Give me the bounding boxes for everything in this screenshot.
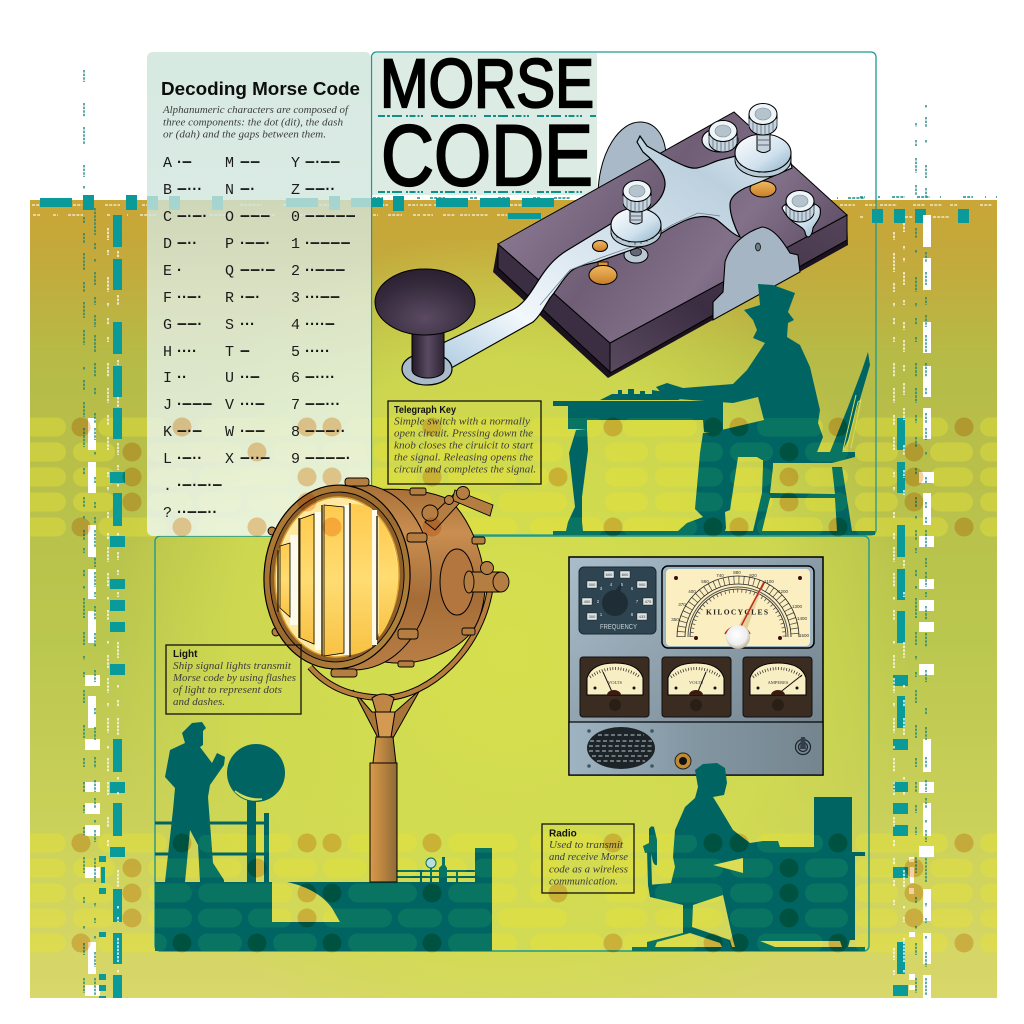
- morse alphabet table: —·—·: [178, 211, 208, 220]
- panel: title plate background: [372, 53, 597, 195]
- morse pill band pattern: [20, 427, 1010, 943]
- morse alphabet table: —————: [306, 211, 357, 220]
- signal man and ship silhouette: [155, 722, 492, 951]
- description: or (dah) and the gaps between them.: [163, 128, 326, 140]
- illustration: radio panel: [569, 557, 823, 775]
- morse alphabet table: ····—: [306, 319, 336, 328]
- morse alphabet table: T: [225, 344, 234, 361]
- morse alphabet table: 4: [291, 317, 300, 334]
- callout: radio: code as a wireless: [549, 864, 628, 876]
- morse alphabet table: 5: [291, 344, 300, 361]
- morse alphabet table: ·: [178, 265, 183, 274]
- morse alphabet table: —: [241, 346, 251, 355]
- morse alphabet table: J: [163, 397, 172, 414]
- frequency selector: 475: [645, 599, 652, 604]
- callout: light: Morse code by using flashes: [172, 673, 296, 684]
- kilocycles dial: 1300: [792, 604, 803, 609]
- morse alphabet table: E: [163, 263, 172, 280]
- morse alphabet table: —··: [178, 238, 198, 247]
- description: [162, 104, 350, 140]
- frequency selector: 3: [600, 586, 603, 591]
- morse alphabet table: ———: [241, 211, 272, 220]
- light crescent on lamp: [235, 791, 262, 800]
- morse alphabet table: 8: [291, 424, 300, 441]
- frame: signal and radio panel: [155, 536, 869, 951]
- callout: radio: Used to transmit: [549, 840, 624, 851]
- right side white blocks: [909, 215, 934, 998]
- callout: light: and dashes.: [173, 697, 225, 708]
- morse alphabet table: .: [163, 478, 172, 495]
- morse alphabet table: 0: [291, 209, 300, 226]
- frequency selector: 600: [606, 572, 613, 577]
- seated man: [656, 284, 823, 531]
- morse alphabet table: ·····: [306, 346, 331, 355]
- lens slats: [271, 494, 403, 660]
- morse alphabet table: ?: [163, 505, 172, 522]
- morse alphabet table: ··: [178, 372, 188, 381]
- right side dash columns: [894, 105, 926, 995]
- callout: telegraph key: knob closes the ciruicit to start: [394, 440, 534, 452]
- adjusting screws: [709, 120, 737, 152]
- nut A: [611, 225, 661, 247]
- title: MORSE CODE: MORSE: [380, 45, 594, 122]
- headphone jack: [675, 753, 691, 769]
- morse alphabet table: R: [225, 290, 234, 307]
- morse alphabet table: ·——·: [241, 238, 271, 247]
- toggle switch: [796, 737, 810, 754]
- brass contacts: [598, 262, 608, 274]
- morse alphabet table: ——·—: [241, 265, 277, 274]
- wooden base: [493, 112, 848, 378]
- meter: volts 2: VOLTS: [689, 680, 704, 685]
- frame: telegraph panel: [372, 52, 876, 535]
- rear washers: [702, 128, 738, 152]
- heading: decoding morse code: Decoding Morse Code: [161, 79, 360, 99]
- callout: radio: and receive Morse: [549, 852, 628, 863]
- morse alphabet table: —·—: [178, 426, 203, 435]
- horizontal morse strip: [32, 197, 997, 217]
- frequency selector: 8: [631, 612, 634, 617]
- morse alphabet table: ——···: [306, 399, 341, 408]
- handles and bolts: [268, 478, 509, 677]
- morse alphabet table: P: [225, 236, 234, 253]
- morse alphabet table: F: [163, 290, 172, 307]
- description: three components: the dot (dit), the dash: [163, 116, 343, 128]
- frequency selector: 1: [600, 612, 603, 617]
- kilocycles dial: 370: [678, 602, 686, 607]
- morse alphabet table: ··———: [306, 265, 347, 274]
- title: MORSE CODE: CODE: [381, 108, 593, 204]
- morse alphabet table: ·—··: [178, 453, 203, 462]
- callout: telegraph key: Simple switch with a normally: [394, 416, 530, 428]
- frequency selector: 300: [589, 614, 596, 619]
- frequency selector: 5: [621, 582, 624, 587]
- chair: [753, 452, 855, 531]
- callout: telegraph key: Telegraph Key: [394, 405, 456, 416]
- morse alphabet table: ····: [178, 346, 198, 355]
- morse alphabet table: 7: [291, 397, 300, 414]
- kilocycles dial: 740: [716, 573, 724, 578]
- yoke: [310, 590, 490, 698]
- morse alphabet table: V: [225, 397, 234, 414]
- silhouette: radio operator at desk: [632, 763, 865, 951]
- morse alphabet table: ·—·—·—: [178, 480, 224, 489]
- callout: radio: communication.: [549, 876, 618, 888]
- kilocycles dial: 350: [671, 617, 679, 622]
- morse dot pattern overlay: [72, 418, 974, 952]
- frequency selector: 433: [639, 614, 646, 619]
- callout: radio: [542, 824, 634, 893]
- front ring: [259, 481, 415, 673]
- morse alphabet table: K: [163, 424, 172, 441]
- morse alphabet table: W: [225, 424, 234, 441]
- meter: volts: VOLTS: [608, 680, 623, 685]
- callout: light: [166, 645, 301, 714]
- frequency selector: FREQUENCY: [600, 622, 637, 631]
- callout: telegraph key: [388, 401, 541, 484]
- silhouette: telegraph operator at table: [553, 284, 875, 535]
- morse alphabet table: I: [163, 370, 172, 387]
- morse alphabet table: ··—·: [178, 292, 203, 301]
- morse alphabet table: —·——: [306, 157, 342, 166]
- morse alphabet table: A: [163, 155, 172, 172]
- morse alphabet table: B: [163, 182, 172, 199]
- callout: light: of light to represent dots: [173, 685, 282, 696]
- morse alphabet table: 2: [291, 263, 300, 280]
- frequency selector: 2: [597, 599, 600, 604]
- morse alphabet table: ——: [241, 157, 261, 166]
- illustration: telegraph key: [375, 104, 848, 385]
- silver lever: [427, 136, 792, 376]
- morse alphabet table: ···——: [306, 292, 341, 301]
- kilocycles dial: 880: [733, 570, 741, 575]
- kilocycles dial: 920: [749, 573, 757, 578]
- title: MORSE CODE: [378, 45, 596, 204]
- kilocycles dial: 400: [688, 589, 696, 594]
- front bracket: [713, 227, 800, 320]
- morse alphabet table: ·——: [241, 426, 266, 435]
- morse alphabet table: ·—·: [241, 292, 261, 301]
- panel: decoding morse code: [147, 52, 371, 536]
- frequency selector: 900: [639, 582, 646, 587]
- kilocycles dial: KILOCYCLES: [706, 608, 768, 616]
- kilocycles dial: 1200: [778, 589, 789, 594]
- kilocycles dial: 1500: [799, 633, 810, 638]
- morse alphabet table: ··—: [241, 372, 261, 381]
- speaker grille: [587, 727, 655, 769]
- morse alphabet table: 1: [291, 236, 300, 253]
- frequency selector: [579, 567, 656, 634]
- morse alphabet table: M: [225, 155, 234, 172]
- frequency selector: 7: [636, 599, 639, 604]
- morse alphabet table: H: [163, 344, 172, 361]
- morse alphabet table: ···—: [241, 399, 266, 408]
- frequency selector: 400: [584, 599, 591, 604]
- left side teal blocks: [99, 215, 125, 998]
- morse alphabet table: ·—: [178, 157, 193, 166]
- morse alphabet table: S: [225, 317, 234, 334]
- morse alphabet table: L: [163, 451, 172, 468]
- callout: radio: Radio: [549, 828, 577, 840]
- morse alphabet table: D: [163, 236, 172, 253]
- morse alphabet table: 3: [291, 290, 300, 307]
- right side teal blocks: [893, 418, 908, 996]
- kilocycles dial: 560: [701, 579, 709, 584]
- morse alphabet table: ··——··: [178, 507, 218, 516]
- morse alphabet table: Z: [291, 182, 300, 199]
- morse alphabet table: O: [225, 209, 234, 226]
- morse alphabet table: ———··: [306, 426, 347, 435]
- drum body: [370, 489, 485, 663]
- kilocycles dial: [662, 566, 814, 649]
- morse alphabet table: ···: [241, 319, 256, 328]
- callout: telegraph key: open circuit. Pressing down the: [394, 428, 533, 440]
- morse alphabet table: U: [225, 370, 234, 387]
- morse alphabet table: —···: [178, 184, 203, 193]
- meter: amperes: [743, 657, 812, 717]
- frequency selector: 4: [610, 582, 613, 587]
- morse alphabet table: [163, 155, 357, 522]
- morse alphabet table: ·———: [178, 399, 214, 408]
- horizontal teal blocks: [40, 195, 969, 223]
- morse alphabet table: 6: [291, 370, 300, 387]
- morse alphabet table: ——·: [178, 319, 203, 328]
- callout: light: Ship signal lights transmit: [173, 661, 292, 672]
- morse alphabet table: —·: [241, 184, 256, 193]
- morse alphabet table: ——··: [306, 184, 336, 193]
- lamp pole: [353, 690, 420, 882]
- callout: light: Light: [173, 649, 198, 660]
- callout: telegraph key: the signal. Releasing opens the: [394, 452, 533, 464]
- meter: amperes: AMPERES: [768, 680, 789, 685]
- morse alphabet table: ————·: [306, 453, 352, 462]
- frequency selector: 6: [631, 586, 634, 591]
- morse alphabet table: Y: [291, 155, 300, 172]
- back bracket: [598, 122, 666, 192]
- morse alphabet table: X: [225, 451, 234, 468]
- left side white blocks: [85, 418, 100, 996]
- morse alphabet table: —····: [306, 372, 336, 381]
- frequency selector: 500: [589, 582, 596, 587]
- green gradient backdrop: [30, 200, 997, 998]
- morse alphabet table: G: [163, 317, 172, 334]
- description: Alphanumeric characters are composed of: [162, 104, 350, 116]
- meter: volts 2: [662, 657, 731, 717]
- lighter pills over silhouettes: [155, 418, 875, 951]
- callout: telegraph key: circuit and completes the signal.: [394, 464, 536, 476]
- knob: [402, 353, 452, 385]
- morse alphabet table: ·————: [306, 238, 352, 247]
- table: [553, 401, 723, 531]
- meter: volts: [580, 657, 649, 717]
- morse alphabet table: —··—: [241, 453, 271, 462]
- floor: [553, 531, 875, 535]
- kilocycles dial: 1400: [797, 616, 808, 621]
- morse alphabet table: N: [225, 182, 234, 199]
- morse alphabet table: 9: [291, 451, 300, 468]
- illustration: signal lamp: [259, 478, 509, 882]
- kilocycles dial: 1100: [764, 579, 774, 584]
- morse alphabet table: C: [163, 209, 172, 226]
- nut B: [735, 153, 791, 177]
- left side dash columns: [84, 70, 118, 995]
- frequency selector: 800: [622, 572, 629, 577]
- morse alphabet table: Q: [225, 263, 234, 280]
